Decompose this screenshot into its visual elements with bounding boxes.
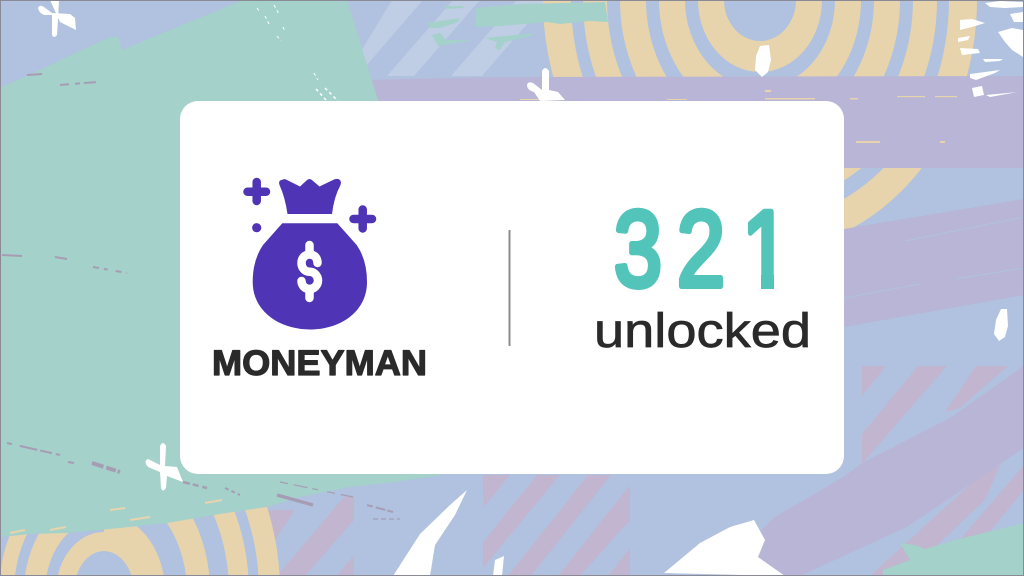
background: teal brush large [0, 0, 443, 537]
background: teal brush bottom right [883, 523, 1024, 576]
icon: white blob right [994, 309, 1008, 341]
icon: white brush cross top center [527, 68, 565, 101]
icon: white brush cross top left [38, 0, 76, 37]
number: 321: 3 [614, 188, 662, 309]
left half of rings [0, 462, 104, 576]
number: 321: 1 [742, 188, 790, 309]
background: cream specks on teal edge [10, 500, 222, 533]
background: purple diagonal stripes lower left [268, 475, 630, 576]
right half of rings [104, 367, 280, 576]
background: teal brush top [428, 2, 608, 50]
icon: dollar sign [302, 245, 318, 298]
background: light diagonal stripes top [352, 0, 548, 76]
icon: bag body [253, 223, 367, 330]
background: thin blue streaks in wedge [844, 217, 1024, 298]
label: unlocked: unlocked [594, 305, 811, 358]
background: lavender wedge right [844, 199, 1024, 327]
background: concentric rings top right [543, 0, 977, 252]
background: cream specks on lavender band [520, 90, 957, 143]
background: lavender diagonal brush lower right [745, 365, 1024, 576]
icon: bag neck [279, 179, 341, 214]
icon: money bag [248, 179, 372, 330]
background: grey-purple grunge specks on teal [2, 74, 400, 519]
icon: sparkle plus left [248, 182, 266, 201]
background: concentric rings bottom left [0, 367, 280, 576]
background: lavender band top [366, 76, 1024, 168]
icon: sparkle plus right [354, 210, 372, 228]
background: white ticks top left [257, 5, 338, 101]
background: white paint splatter top right [958, 1, 1023, 97]
number: 321 [614, 208, 774, 290]
background: purple diagonal stripes lower right [862, 366, 1024, 576]
icon: white brush cross bottom left [146, 443, 183, 490]
panel: white card [180, 101, 844, 474]
number: 321: 2 [677, 188, 725, 309]
divider [508, 230, 510, 346]
logo wordmark: MONEYMAN [212, 344, 427, 383]
icon: sparkle dot [252, 223, 261, 232]
background: white brush strokes bottom [393, 490, 785, 576]
icon: white blob top [755, 45, 771, 77]
